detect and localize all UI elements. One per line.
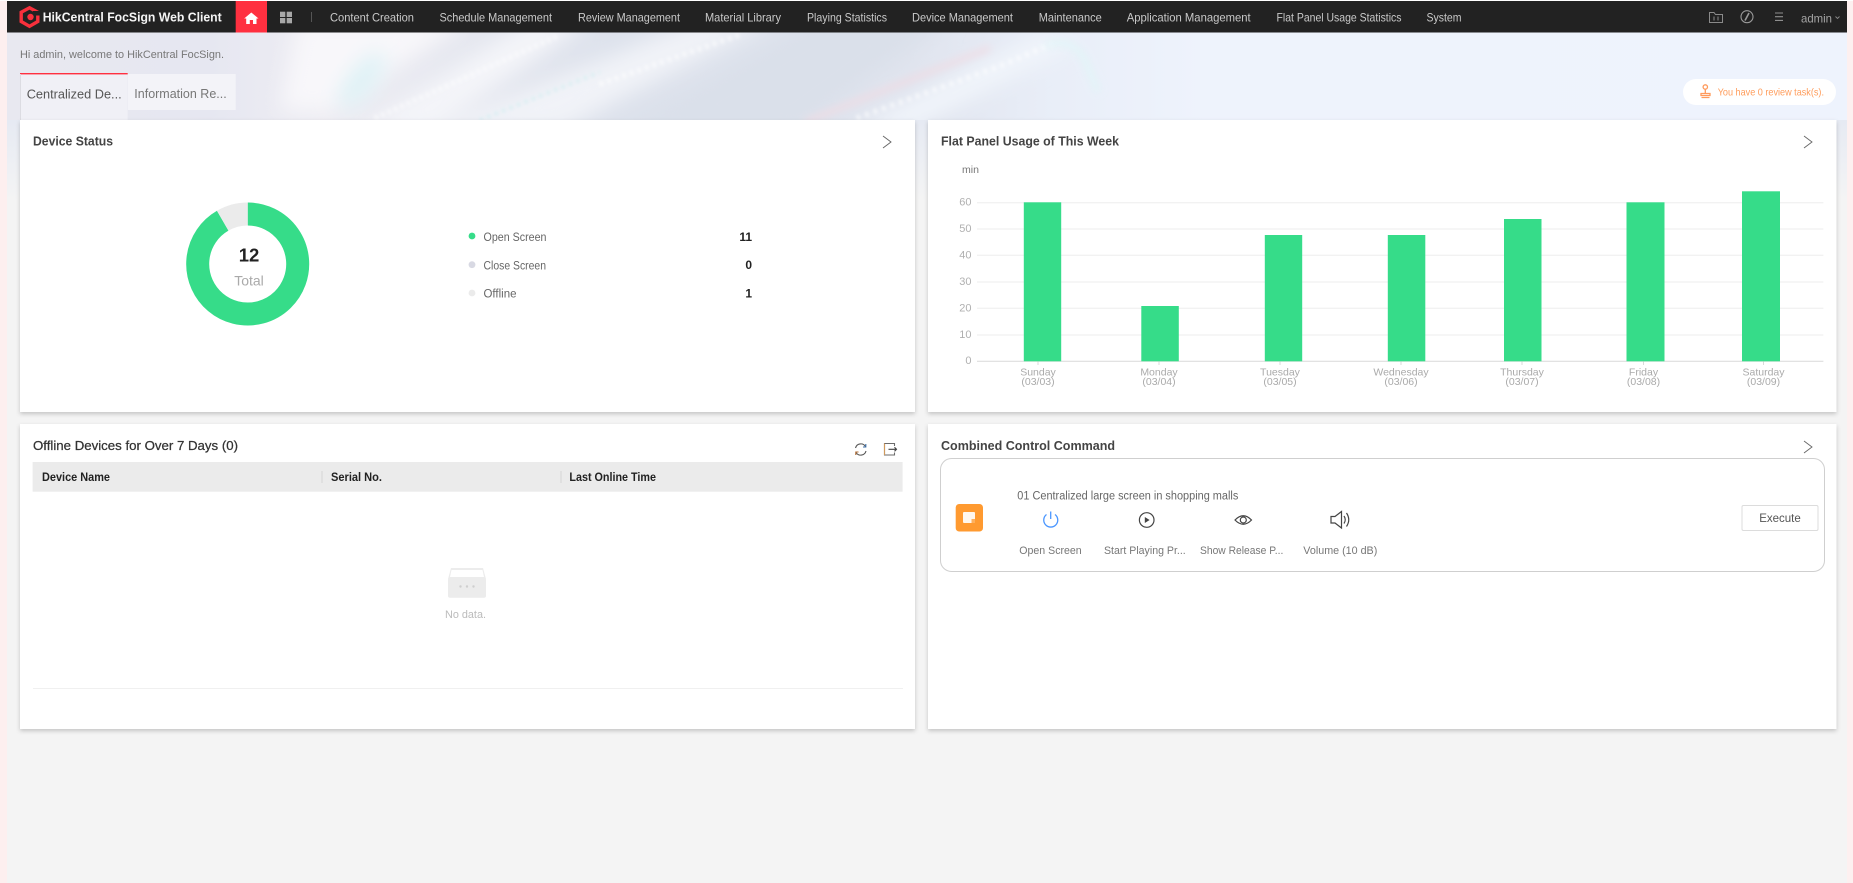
icon: empty box: [448, 568, 486, 598]
icon: command badge: [956, 504, 983, 532]
icon: caret: [1836, 16, 1840, 18]
legend: open screen: [469, 230, 752, 244]
panel: flat panel usage: [928, 120, 1836, 412]
action: open screen: [1019, 512, 1082, 557]
navigation menu: Playing Statistics: [807, 10, 887, 24]
icon: logo: [21, 8, 40, 26]
heading: Offline Devices for Over 7 Days (0): [33, 438, 238, 453]
heading: Flat Panel Usage of This Week: [941, 134, 1120, 148]
y axis labels: 40: [959, 250, 972, 262]
legend: offline: 1: [745, 286, 752, 300]
navigation menu: Review Management: [578, 10, 681, 24]
donut total: 12: [239, 244, 259, 266]
x axis labels: (03/04): [1142, 376, 1176, 388]
home button: [236, 1, 267, 32]
x axis labels: (03/09): [1747, 376, 1780, 388]
user name: admin: [1801, 11, 1832, 25]
review task notice: [1683, 79, 1836, 105]
empty state text: No data.: [445, 609, 486, 621]
navigation menu: Application Management: [1127, 10, 1251, 24]
action: volume: [1303, 512, 1377, 557]
tab: information release: [128, 74, 236, 110]
legend: offline: [469, 286, 752, 300]
panel: offline devices: [20, 424, 915, 729]
icon: refresh: [856, 444, 866, 455]
x axis labels: Friday: [1629, 366, 1659, 378]
table header: Device Name: [42, 472, 110, 484]
navigation menu: Schedule Management: [440, 10, 553, 24]
execute button: Execute: [1759, 513, 1801, 525]
command name: 01 Centralized large screen in shopping malls: [1017, 490, 1239, 502]
x axis labels: Tuesday: [1260, 366, 1301, 378]
hero pink band: [810, 107, 841, 120]
legend: open screen: Open Screen: [484, 232, 546, 244]
x axis labels: Monday: [1140, 366, 1178, 378]
x axis labels: (03/07): [1505, 376, 1539, 388]
bars: [1024, 191, 1780, 361]
x axis labels: (03/05): [1263, 376, 1297, 388]
icon: chevron: [883, 136, 891, 148]
navigation menu: Flat Panel Usage Statistics: [1276, 10, 1402, 24]
donut total: [234, 244, 264, 288]
icon: menu: [1775, 13, 1783, 20]
action: volume: Volume (10 dB): [1303, 545, 1377, 557]
navigation menu: [330, 10, 1462, 24]
table header: Last Online Time: [569, 472, 656, 484]
command card: [940, 458, 1824, 572]
hero light streaks: [480, 36, 918, 120]
icon: chevron: [1804, 441, 1812, 453]
x axis labels: Thursday: [1500, 366, 1545, 378]
heading: Device Status: [33, 134, 113, 148]
table header: Serial No.: [331, 472, 382, 484]
y axis labels: 20: [959, 302, 972, 314]
x axis labels: Sunday: [1020, 366, 1057, 378]
y axis labels: 30: [959, 276, 972, 288]
x axis labels: (03/08): [1627, 376, 1660, 388]
donut chart: [198, 214, 298, 314]
bar chart: [959, 164, 1823, 388]
x axis labels: Wednesday: [1373, 366, 1429, 378]
tab: information release: Information Re...: [134, 86, 227, 101]
icon: folder: [1710, 12, 1722, 22]
icon: export: [884, 444, 896, 455]
x axis labels: [1020, 366, 1785, 388]
donut total: Total: [234, 272, 264, 288]
navigation menu: Content Creation: [330, 10, 414, 24]
welcome message: Hi admin, welcome to HikCentral FocSign.: [20, 49, 224, 61]
tab: centralized device: [20, 73, 128, 120]
hero streak bend: [1050, 44, 1052, 45]
hero banner background: [7, 32, 1847, 120]
navigation menu: Material Library: [705, 10, 781, 24]
legend: offline: Offline: [484, 288, 516, 300]
execute button: [1742, 506, 1818, 530]
y axis unit: min: [962, 164, 979, 176]
legend: open screen: 11: [739, 230, 752, 244]
tab: centralized device: Centralized De...: [27, 86, 122, 102]
y axis labels: 0: [965, 355, 972, 367]
x axis labels: (03/06): [1384, 376, 1418, 388]
icon: chevron: [1804, 136, 1812, 148]
y axis labels: 50: [959, 223, 972, 235]
table header: [33, 462, 903, 492]
product name: HikCentral FocSign Web Client: [43, 10, 222, 24]
x axis labels: Saturday: [1742, 366, 1785, 378]
panel: device status: [20, 120, 915, 412]
panel: combined control command: [928, 424, 1836, 729]
navigation menu: Device Management: [912, 10, 1014, 24]
icon: compass: [1741, 11, 1753, 23]
navigation menu: Maintenance: [1039, 10, 1102, 24]
review task notice: You have 0 review task(s).: [1718, 86, 1824, 98]
y axis labels: 60: [959, 196, 972, 208]
icon: stamp: [1701, 85, 1710, 98]
navigation menu: System: [1426, 10, 1462, 24]
action: show release program: Show Release P...: [1200, 545, 1283, 557]
legend: close screen: 0: [745, 258, 752, 272]
heading: Combined Control Command: [941, 438, 1115, 453]
y axis labels: [959, 196, 972, 367]
top navigation bar: [7, 1, 1847, 32]
action: open screen: Open Screen: [1019, 545, 1082, 557]
action: start playing program: Start Playing Pr...: [1104, 545, 1186, 557]
icon: app grid: [280, 12, 292, 23]
y axis labels: 10: [959, 329, 972, 341]
hero cyan glow: [338, 52, 386, 103]
action: start playing program: [1104, 513, 1186, 557]
action: show release program: [1200, 516, 1283, 557]
legend: close screen: [469, 258, 752, 272]
legend: close screen: Close Screen: [484, 260, 546, 272]
x axis labels: (03/03): [1021, 376, 1055, 388]
